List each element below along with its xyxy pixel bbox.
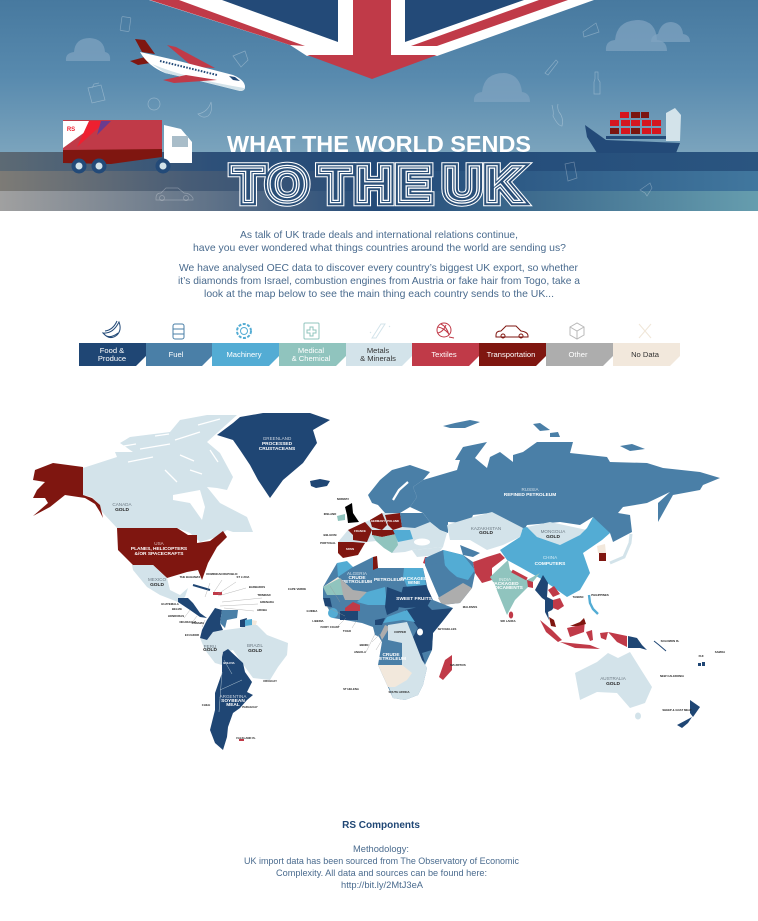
legend: medical and chemical	[279, 343, 346, 366]
small label europe: IRELAND	[324, 512, 336, 516]
North America	[33, 413, 330, 618]
Italy and Balkans	[372, 534, 398, 553]
legend: machinery	[212, 343, 279, 366]
DRC and southern Africa	[380, 622, 427, 700]
Chad	[385, 587, 403, 615]
small country labels and leader lines: ECUADOR	[185, 633, 199, 637]
legend: food and produce: Food &	[100, 346, 124, 355]
Korea	[597, 544, 606, 561]
Mauritania	[323, 578, 348, 595]
intro text: have you ever wondered what things countries around the world are sending us?	[193, 242, 566, 254]
intro text: it’s diamonds from Israel, combustion engines from Austria or fake hair from Togo, take a	[178, 275, 580, 287]
small label europe: BELGIUM	[324, 533, 337, 537]
Afghanistan and Pakistan	[473, 553, 505, 583]
Canada	[83, 415, 253, 542]
Namibia and Botswana	[378, 665, 412, 687]
Algeria	[338, 567, 373, 592]
Oman and Yemen	[438, 583, 472, 605]
small country labels and leader lines: PHILIPPINES	[591, 593, 609, 597]
legend: no data: No Data	[631, 350, 660, 359]
Canada: GOLD	[115, 507, 129, 513]
Australia: GOLD	[606, 681, 620, 687]
Greenland: CRUSTACEANS	[259, 446, 296, 452]
Saudi Arabia	[425, 563, 463, 593]
Sudan: SWEET FRUITS	[396, 596, 433, 602]
legend	[79, 321, 680, 366]
small label europe: PORTUGAL	[320, 541, 336, 545]
Mali	[340, 578, 367, 600]
Russia	[410, 442, 720, 542]
Mexico	[132, 565, 188, 602]
China	[500, 517, 610, 597]
Laos	[548, 586, 560, 597]
Angola: CRUDE	[382, 652, 400, 658]
Canada: CANADA	[112, 502, 133, 507]
Alaska and USA: PLANES, HELICOPTERS	[131, 546, 188, 552]
Egypt: WINE	[408, 580, 421, 586]
Kazakhstan: KAZAKHSTAN	[471, 526, 501, 531]
Colombia	[200, 608, 223, 640]
Alaska and USA	[33, 463, 227, 580]
small country labels and leader lines: MALDIVES	[463, 605, 477, 609]
Australia: AUSTRALIA	[600, 676, 627, 681]
legend: no data	[613, 343, 680, 366]
small country labels and leader lines: NICARAGUA	[179, 620, 197, 624]
Svalbard and arctic islands	[443, 420, 645, 451]
Syria	[423, 557, 435, 565]
Russia: REFINED PETROLEUM	[504, 492, 556, 498]
Egypt: PACKAGED	[400, 576, 428, 582]
flag chevron	[149, 0, 594, 79]
African base land	[323, 557, 453, 700]
Nigeria	[362, 605, 382, 623]
Black Sea	[414, 538, 430, 546]
road and sea bands	[0, 152, 758, 211]
small country labels and leader lines: BELIZE	[172, 607, 182, 611]
Middle East base land	[425, 550, 475, 605]
legend: food and produce	[79, 343, 146, 366]
West Africa	[323, 598, 360, 620]
Japan	[610, 534, 631, 563]
United Kingdom	[345, 503, 359, 523]
header banner	[0, 0, 758, 212]
small country labels and leader lines: SRI LANKA	[500, 619, 516, 623]
Kazakhstan	[447, 512, 523, 550]
Vietnam	[553, 598, 564, 610]
small country labels and leader lines: SAMOA	[715, 650, 725, 654]
small country labels and leader lines: BARBADOS	[249, 585, 265, 589]
legend: metals and minerals: Metals	[367, 346, 389, 355]
Greenland	[217, 413, 330, 498]
small country labels and leader lines: FIJI	[699, 654, 704, 658]
India	[487, 560, 540, 615]
European base land	[338, 513, 447, 553]
legend: food and produce: Produce	[98, 354, 126, 363]
small country labels and leader lines: SOLOMON IS.	[661, 639, 680, 643]
Spain	[338, 542, 365, 558]
small country labels and leader lines: URUGUAY	[263, 679, 277, 683]
Brazil and Peru: BRAZIL	[247, 643, 263, 648]
small country labels and leader lines: BENIN	[360, 643, 368, 647]
New Zealand: SHEEP & GOAT MEAT	[662, 708, 692, 712]
Nepal and Bangladesh	[512, 571, 533, 588]
Ireland	[337, 514, 345, 521]
Iran	[443, 550, 475, 580]
title line two striped: TO THE UK	[232, 156, 526, 212]
sketch icons	[88, 17, 652, 201]
Australia	[575, 652, 652, 720]
Iraq	[428, 550, 445, 568]
methodology text	[244, 844, 519, 890]
small country labels and leader lines: PANAMA	[192, 621, 204, 625]
intro text	[178, 229, 580, 300]
Libya: PETROLEUM	[374, 577, 404, 583]
Algeria: CRUDE	[348, 575, 366, 581]
India: MEDICAMENTS	[487, 585, 524, 591]
ship	[585, 108, 681, 153]
Solomon Islands and Fiji	[654, 641, 705, 666]
Mexico: GOLD	[150, 582, 164, 588]
clouds	[66, 20, 690, 102]
small country labels and leader lines: LIBERIA	[312, 619, 324, 623]
small country labels and leader lines: DOMINICAN REPUBLIC	[206, 572, 238, 576]
Guyana and Suriname	[240, 618, 257, 627]
methodology text: Methodology:	[353, 844, 409, 854]
small country labels and leader lines: ST HELENA	[343, 687, 359, 691]
small country labels and leader lines: GRENADA	[260, 600, 274, 604]
Southern cone: BOLIVIA	[223, 661, 235, 665]
small country labels and leader lines: THE BAHAMAS	[180, 575, 200, 579]
Falkland Islands	[239, 739, 244, 741]
legend: other	[546, 343, 613, 366]
Angola: PETROLEUM	[376, 656, 406, 662]
truck	[63, 120, 192, 174]
Southeast Asia and Oceania	[535, 575, 705, 728]
small country labels and leader lines: GUATEMALA	[161, 602, 179, 606]
small label europe: SPAIN	[346, 547, 354, 551]
small country labels and leader lines: ST LUCIA	[237, 575, 249, 579]
intro text: look at the map below to see the main thing each country sends to the UK...	[204, 288, 554, 300]
small country labels and leader lines: TRINIDAD	[257, 593, 271, 597]
Cameroon	[375, 618, 385, 625]
Central African belt	[383, 610, 415, 623]
title line one: WHAT THE WORLD SENDS	[227, 131, 531, 157]
small label europe: GERMANY	[371, 519, 385, 523]
legend: textiles	[412, 343, 479, 366]
DRC and southern Africa: SOUTH AFRICA	[388, 690, 410, 694]
Mongolia: MONGOLIA	[541, 529, 566, 534]
small country labels and leader lines: GUINEA	[307, 609, 317, 613]
India: PACKAGED	[491, 581, 519, 587]
Southern cone: ARGENTINA	[220, 694, 247, 699]
Central Europe	[372, 530, 396, 537]
Middle East and South Asia	[425, 545, 540, 618]
small country labels and leader lines	[161, 572, 725, 740]
Philippines	[589, 595, 598, 614]
small country labels and leader lines: ARUBA	[257, 608, 267, 612]
Southern cone: MEAL	[226, 702, 240, 708]
Ukraine and neighbours	[393, 530, 413, 542]
Africa	[323, 556, 453, 700]
legend: fuel	[146, 343, 212, 366]
title line two striped: TO THE UK	[232, 156, 526, 212]
Scandinavia and northern Europe	[368, 465, 430, 513]
Brazil and Peru: PERU	[204, 644, 216, 649]
small country labels and leader lines: ANGOLA	[354, 650, 366, 654]
legend: medical and chemical: & Chemical	[292, 354, 331, 363]
small country labels and leader lines: MAURITIUS	[450, 663, 466, 667]
Algeria: ALGERIA	[347, 571, 368, 576]
Russia and northern Asia	[410, 420, 720, 597]
Sri Lanka	[509, 612, 513, 618]
small country labels and leader lines: TAIWAN	[573, 595, 583, 599]
plane	[130, 39, 245, 91]
Egypt	[400, 568, 428, 587]
DRC and southern Africa: COPPER	[394, 630, 406, 634]
Iceland	[310, 479, 330, 488]
Kazakhstan: GOLD	[479, 530, 493, 536]
small country labels and leader lines: CAPE VERDE	[288, 587, 306, 591]
small country labels and leader lines: IVORY COAST	[320, 625, 340, 629]
methodology text: Complexity. All data and sources can be found here:	[276, 868, 487, 878]
East Africa	[405, 605, 453, 663]
truck: RS	[67, 127, 75, 133]
Algeria: PETROLEUM	[342, 579, 372, 585]
legend: transportation	[479, 343, 546, 366]
India: INDIA	[499, 577, 512, 582]
Mongolia	[527, 522, 587, 545]
methodology text: UK import data has been sourced from The Observatory of Economic	[244, 856, 519, 866]
Greenland: GREENLAND	[263, 436, 292, 441]
Brazil and Peru: GOLD	[203, 647, 217, 653]
Alaska and USA: USA	[154, 541, 165, 546]
China: CHINA	[543, 555, 558, 560]
Greenland: PROCESSED	[262, 441, 293, 447]
France	[348, 522, 372, 542]
Sumatra, Java, Borneo, Sulawesi	[540, 620, 627, 649]
Venezuela	[215, 610, 238, 628]
Morocco	[337, 561, 353, 577]
small label europe: NORWAY	[337, 497, 349, 501]
Gabon and Congo	[373, 627, 383, 637]
Brazil and Peru	[200, 625, 288, 680]
Russia: RUSSIA	[521, 487, 539, 492]
legend: transportation: Transportation	[487, 350, 535, 359]
legend icons	[103, 321, 651, 339]
Southern cone: SOYBEAN	[221, 698, 245, 704]
legend: fuel: Fuel	[169, 350, 184, 359]
Alaska and USA: &/OR SPACECRAFTS	[135, 551, 184, 557]
legend: medical and chemical: Medical	[298, 346, 324, 355]
legend: textiles: Textiles	[431, 350, 457, 359]
small country labels and leader lines: NEW CALEDONIA	[660, 674, 684, 678]
small country labels and leader lines: SEYCHELLES	[438, 627, 456, 631]
Baltic sea	[393, 482, 408, 500]
footer heading: RS Components	[342, 820, 420, 831]
Congo strip	[380, 625, 390, 640]
small label europe: FRANCE	[354, 529, 366, 533]
Western Sahara	[323, 577, 340, 590]
small country labels and leader lines: TOGO	[343, 629, 352, 633]
small label europe	[320, 497, 399, 551]
Libya	[373, 570, 404, 593]
Turkey and Caucasus	[412, 547, 443, 557]
Tunisia	[373, 556, 378, 570]
Sudan	[396, 585, 433, 608]
small country labels and leader lines: CHILE	[202, 703, 210, 707]
Belarus and Baltic states	[400, 513, 430, 528]
Mongolia: GOLD	[546, 534, 560, 540]
legend: other: Other	[568, 350, 588, 359]
small label europe: POLAND	[387, 519, 399, 523]
intro text: We have analysed OEC data to discover every country’s biggest UK export, so whether	[179, 262, 578, 274]
Niger	[357, 587, 387, 605]
small country labels and leader lines: HONDURAS	[168, 614, 184, 618]
Germany	[370, 513, 387, 530]
Papua New Guinea	[628, 636, 647, 650]
Turkmenistan and Uzbekistan	[460, 545, 480, 557]
South America	[200, 608, 288, 750]
title line two striped: TO THE UK	[232, 156, 526, 212]
methodology text: http://bit.ly/2MtJ3eA	[341, 880, 424, 890]
intro text: As talk of UK trade deals and international relations continue,	[240, 229, 518, 241]
Poland	[385, 513, 402, 530]
Southern cone	[210, 649, 253, 750]
Lake Victoria	[417, 628, 423, 636]
Europe	[320, 465, 447, 565]
Mexico: MEXICO	[148, 577, 166, 582]
world map	[33, 413, 725, 750]
Myanmar and Thailand	[535, 575, 557, 620]
legend: machinery: Machinery	[226, 350, 262, 359]
Malaysia	[549, 617, 586, 627]
small country labels and leader lines: PARAGUAY	[242, 705, 258, 709]
China: COMPUTERS	[535, 561, 566, 567]
Central America and Caribbean	[178, 585, 222, 618]
Angola	[376, 642, 406, 665]
legend: metals and minerals	[346, 343, 412, 366]
small country labels and leader lines: FALKLAND IS.	[236, 736, 256, 740]
New Zealand	[662, 700, 700, 728]
Madagascar	[439, 655, 452, 680]
title line two striped: TO THE UK	[232, 156, 526, 212]
legend: metals and minerals: & Minerals	[360, 354, 396, 363]
Brazil and Peru: GOLD	[248, 648, 262, 654]
